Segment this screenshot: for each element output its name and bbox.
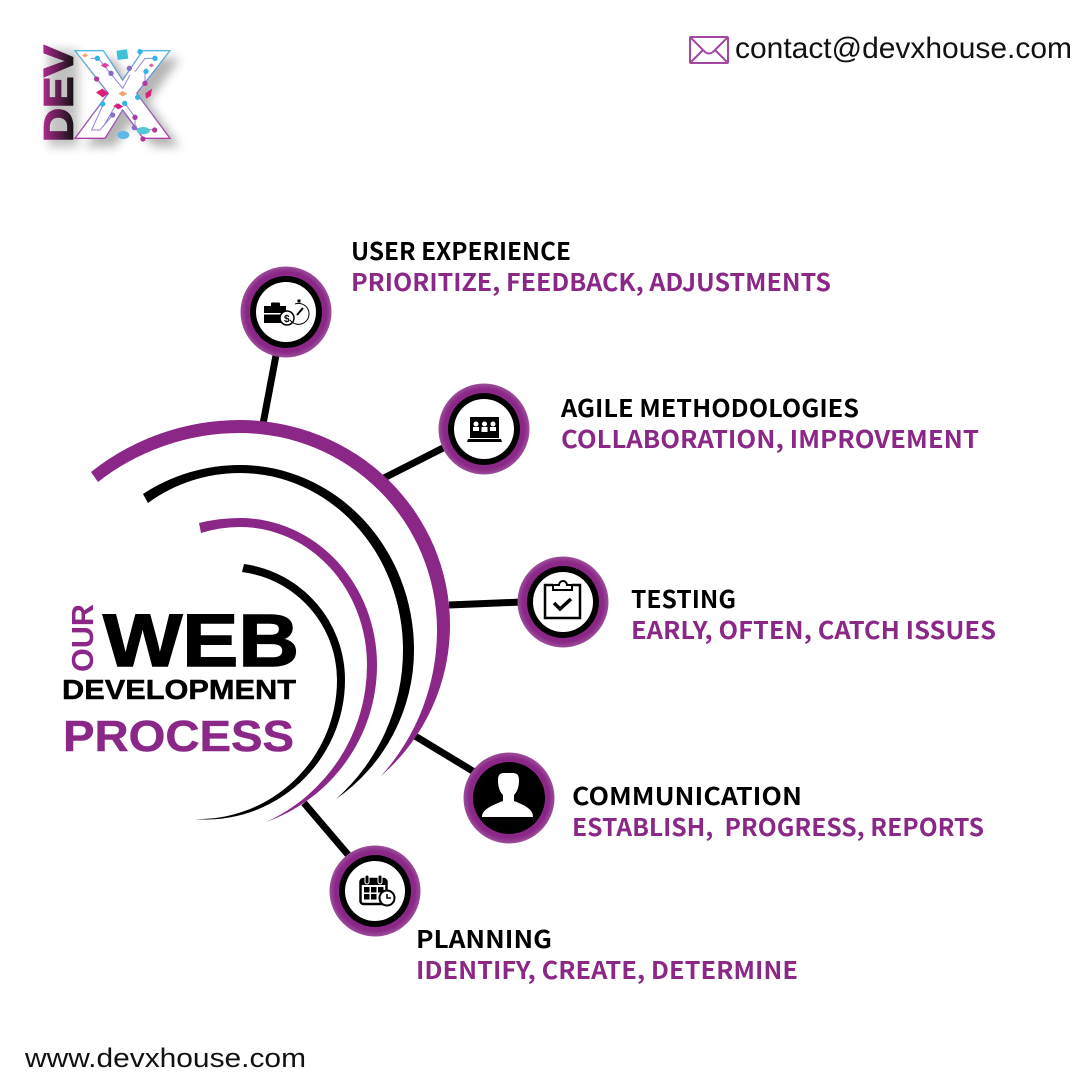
text: planning: IDENTIFY, CREATE, DETERMINE [416,952,798,987]
text: testing: EARLY, OFTEN, CATCH ISSUES [631,612,996,647]
text: user experience: PRIORITIZE, FEEDBACK, ADJUSTMENTS [351,264,831,299]
text: testing [631,581,996,647]
logo: DevX [35,45,180,147]
icon: person silhouette [482,773,533,817]
title: Our Web Development Process: OUR [65,604,100,672]
concentric arcs [91,420,450,822]
contact email: contact@devxhouse.com [735,32,1072,65]
text: planning [416,921,798,987]
icon: calendar and clock [360,875,394,906]
text: agile methodologies [560,390,979,456]
icon: laptop with team [467,417,502,442]
text: agile methodologies: AGILE METHODOLOGIES [560,390,859,425]
title: Our Web Development Process [62,599,299,761]
icon: briefcase, coin and stopwatch: $ [284,314,290,325]
icon: envelope [690,37,728,63]
text: user experience [351,233,831,299]
node: planning icon [330,846,420,936]
text: user experience: USER EXPERIENCE [351,233,571,268]
node: agile methodologies icon [438,384,530,474]
text: agile methodologies: COLLABORATION, IMPROVEMENT [561,421,979,456]
text: communication [572,778,984,844]
text: communication: COMMUNICATION [572,778,802,813]
node: user experience icon [240,266,332,358]
title: Our Web Development Process: PROCESS [63,712,294,761]
text: communication: ESTABLISH, PROGRESS, REPORTS [572,809,984,844]
icon: clipboard check [545,581,580,618]
text: testing: TESTING [631,581,736,616]
node: communication icon [464,752,554,844]
website url: www.devxhouse.com [24,1043,306,1073]
title: Our Web Development Process: WEB [103,599,299,682]
text: planning: PLANNING [416,921,552,956]
title: Our Web Development Process: DEVELOPMENT [62,674,296,705]
logo: DevX: DEV [35,45,81,142]
connector lines [263,350,522,857]
node: testing icon [518,556,608,648]
